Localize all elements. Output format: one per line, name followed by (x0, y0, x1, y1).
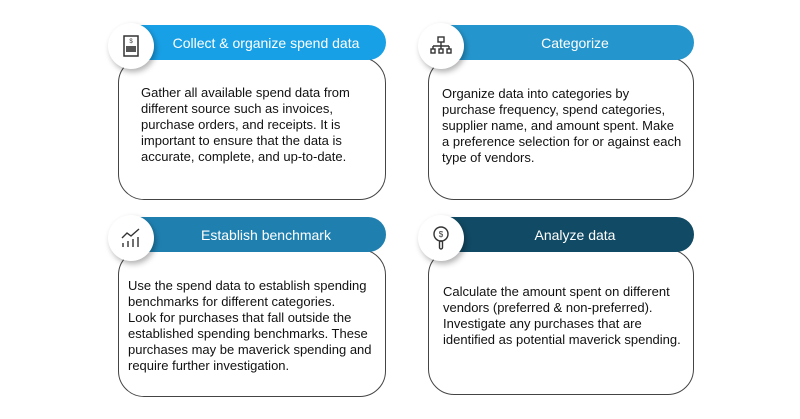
text (141, 85, 350, 164)
text: purchase frequency, spend categories, (442, 102, 665, 117)
box (428, 249, 694, 395)
text: Calculate the amount spent on different (443, 284, 670, 299)
icon: hierarchy (418, 23, 464, 69)
header: Establish benchmark (201, 226, 331, 242)
panel: benchmark (106, 215, 386, 397)
text: purchases may be maverick spending and (128, 342, 372, 357)
text: type of vendors. (442, 150, 534, 165)
box (428, 57, 694, 200)
panel: analyze (416, 215, 694, 395)
text: a preference selection for or against each (442, 134, 681, 149)
icon: receipt (108, 23, 154, 69)
text (442, 86, 681, 165)
text: identified as potential maverick spending. (443, 332, 681, 347)
header: Collect & organize spend data (173, 34, 359, 50)
icon: magnifier dollar: $ (439, 230, 444, 239)
panel: collect (106, 23, 386, 200)
text: Gather all available spend data from (141, 85, 350, 100)
text (128, 278, 372, 373)
icon: magnifier dollar (418, 215, 464, 261)
icon: chart (108, 215, 154, 261)
header (426, 217, 694, 252)
header (426, 25, 694, 60)
text: important to ensure that the data is (141, 133, 342, 148)
text: Investigate any purchases that are (443, 316, 642, 331)
text: purchase orders, and receipts. It is (141, 117, 340, 132)
header: Categorize (541, 34, 609, 50)
icon: receipt: $ (129, 39, 133, 45)
text (443, 284, 681, 347)
text: established spending benchmarks. These (128, 326, 368, 341)
text: Use the spend data to establish spending (128, 278, 367, 293)
box (118, 249, 386, 397)
text: supplier name, and amount spent. Make (442, 118, 674, 133)
box (118, 57, 386, 200)
text: Organize data into categories by (442, 86, 629, 101)
panel: categorize (416, 23, 694, 200)
text: require further investigation. (128, 358, 289, 373)
text: vendors (preferred & non-preferred). (443, 300, 653, 315)
text: accurate, complete, and up-to-date. (141, 149, 346, 164)
text: Look for purchases that fall outside the (128, 310, 351, 325)
text: different source such as invoices, (141, 101, 333, 116)
text: benchmarks for different categories. (128, 294, 335, 309)
header: Analyze data (535, 226, 615, 242)
header (116, 217, 386, 252)
header (116, 25, 386, 60)
